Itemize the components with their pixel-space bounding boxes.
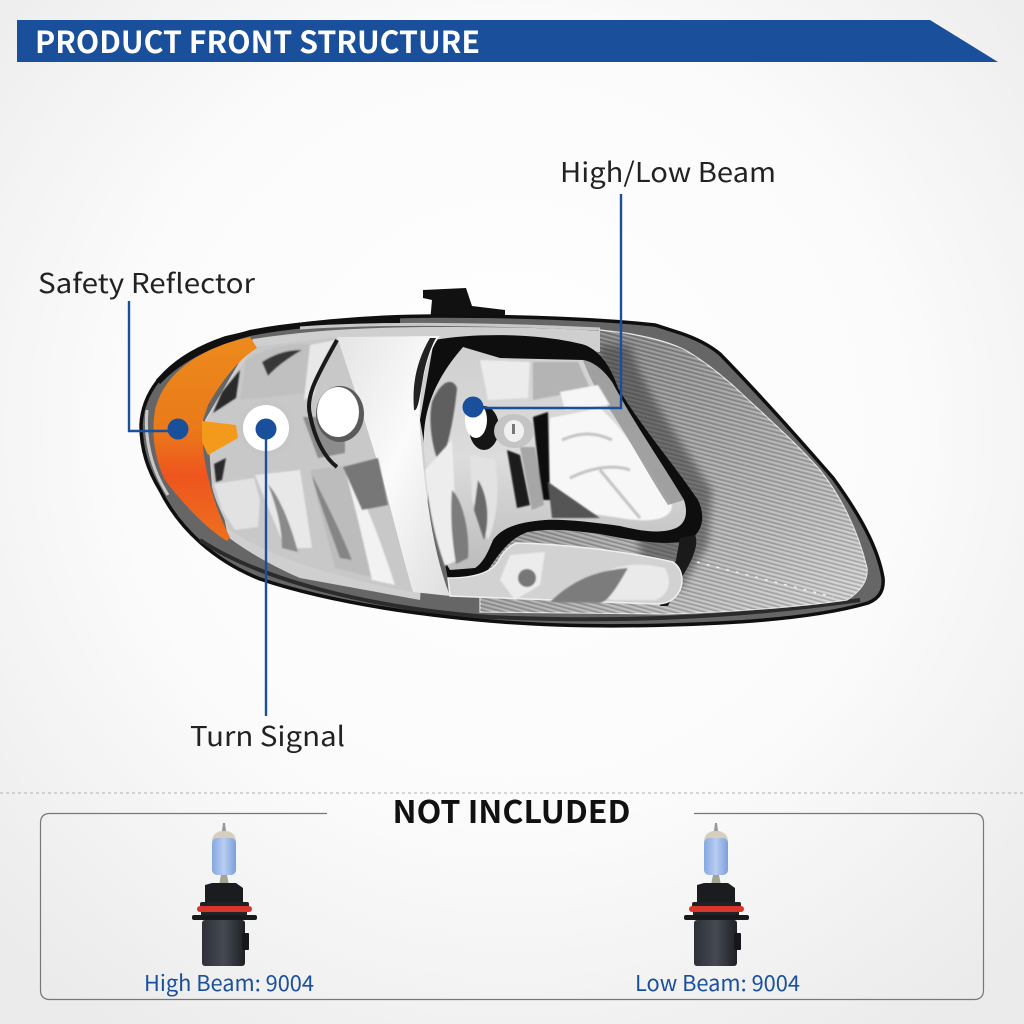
lens seam xyxy=(697,562,833,597)
lens ridges xyxy=(480,330,867,614)
lower chamber facets xyxy=(500,552,669,603)
header banner: PRODUCT FRONT STRUCTURE xyxy=(35,18,480,62)
header banner xyxy=(17,18,998,62)
low beam facets xyxy=(213,340,395,585)
ribbon tail xyxy=(660,535,696,606)
callout: turn signal: Turn Signal xyxy=(190,715,345,754)
chrome body xyxy=(205,327,600,600)
black housing ribbon xyxy=(420,335,702,580)
reflector streaks xyxy=(562,434,640,518)
callout: turn signal xyxy=(190,418,345,754)
clear lens xyxy=(480,330,867,614)
mounting tab xyxy=(423,288,505,322)
dark upper-left arc xyxy=(158,320,400,382)
callout: high/low beam xyxy=(462,151,776,418)
high beam gray rim xyxy=(583,360,684,505)
housing and bezel xyxy=(141,316,883,626)
amber wedge xyxy=(202,421,238,455)
callout: high/low beam: High/Low Beam xyxy=(560,151,776,190)
icon: low beam bulb xyxy=(684,823,749,966)
callout: safety reflector xyxy=(38,262,256,440)
icon: high beam bulb xyxy=(192,823,257,966)
light left rim xyxy=(146,410,168,495)
low beam chamber xyxy=(207,337,413,592)
section divider xyxy=(0,792,1024,794)
center diagonal strip xyxy=(337,336,450,596)
strip black edge xyxy=(414,338,436,410)
high beam white reflector xyxy=(548,408,672,520)
low beam reflector circles xyxy=(238,340,364,467)
panel: not included xyxy=(40,787,984,1000)
label: high beam: High Beam: 9004 xyxy=(144,966,314,998)
panel: not included: NOT INCLUDED xyxy=(392,787,630,832)
lens shade xyxy=(598,345,712,600)
dark lower band xyxy=(200,540,860,619)
high beam chamber xyxy=(424,347,686,570)
callout: safety reflector: Safety Reflector xyxy=(38,262,256,301)
lower chamber xyxy=(448,543,682,604)
amber reflector xyxy=(153,337,257,541)
label: low beam: Low Beam: 9004 xyxy=(635,966,800,998)
high beam bulb socket xyxy=(465,402,534,450)
high beam facets xyxy=(425,360,610,566)
light top rim xyxy=(300,324,600,329)
